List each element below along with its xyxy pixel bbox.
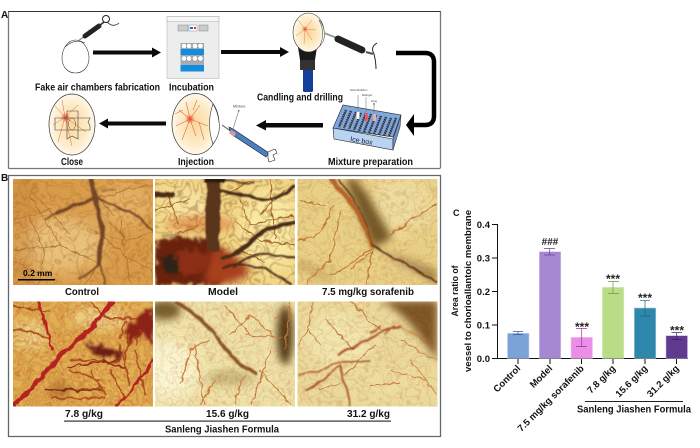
panel: C bar chart [450,208,691,434]
x axis labels: 7.8 g/kg [585,363,618,396]
photo: 15.6 g/kg [142,300,295,406]
bar: model [539,237,561,358]
label: fake air chambers fabrication: Fake air chambers fabrication [35,82,160,94]
scale bar: 0.2 mm [23,268,53,278]
photo: model [155,179,300,285]
bar: control [508,332,529,358]
label: mixture preparation: Mixture preparation [328,156,413,168]
bar: 7.8 g/kg [602,272,624,358]
panel C label: C [453,208,460,218]
x axis labels: Model [528,363,555,391]
photo: control [13,179,155,285]
label: candling and drilling: Candling and drilling [257,92,343,104]
arrow: incubation to candling [221,47,289,57]
y axis title: Area ratio of [450,265,461,316]
bar: 7.5 mg/kg sorafenib [571,320,592,358]
y axis title [450,210,474,372]
label: control: Control [65,286,99,298]
photo: 7.5 mg/kg sorafenib [297,177,438,285]
label: model: Model [208,286,238,298]
panel B label: B [1,173,8,184]
x axis labels: Control [491,363,523,395]
panel A label: A [1,10,8,21]
photo: 31.2 g/kg [298,301,438,406]
y axis and ticks: 0.0 [477,354,490,365]
bracket line: chart formula groups [585,401,683,402]
icon: injection egg and syringe [172,94,277,162]
y axis and ticks: 0.4 [477,220,491,231]
bar: 7.5 mg/kg sorafenib: *** [575,320,589,334]
x axis labels: 31.2 g/kg [645,363,682,400]
y axis and ticks: 0.3 [477,254,490,264]
icon: ice box with tubes [333,88,401,150]
arrow: injection to close [99,118,166,128]
label: 15.6 g/kg: 15.6 g/kg [206,408,249,420]
x axis labels: 15.6 g/kg [614,363,650,400]
icon: ice box with tubes: Ice box [350,136,374,147]
icon: candling lamp, egg and drill [293,13,377,92]
x axis labels [491,363,682,434]
label: close: Close [61,156,83,168]
label: 7.8 g/kg: 7.8 g/kg [65,408,103,420]
bar: 15.6 g/kg: *** [638,291,652,305]
icon: ice box with tubes: HGG-RGDfcn [350,88,368,92]
icon: incubator [167,16,219,78]
label: incubation: Incubation [169,82,214,94]
photo: 7.8 g/kg [12,301,153,406]
arrow: mixture to injection [256,120,323,130]
x axis labels: 7.5 mg/kg sorafenib [516,363,587,434]
bar: 31.2 g/kg [666,324,688,358]
arrow: curved candling to mixture [396,53,434,136]
icon: closed egg with tape [49,94,95,155]
panel: A workflow [1,10,441,168]
y axis and ticks: 0.1 [477,320,491,332]
bar: 15.6 g/kg [634,291,656,358]
icon: ice box with tubes: Matrigel [362,93,372,97]
icon: ice box with tubes: Drug [371,99,378,103]
bracket line: formula groups [64,420,391,422]
panel A frame [8,12,441,168]
icon: egg with fake air chamber tool [62,16,119,73]
bar: model: ### [542,237,559,248]
bar: 7.8 g/kg: *** [606,272,620,286]
bar: 31.2 g/kg: *** [670,324,684,338]
y axis and ticks [477,220,688,365]
label: Sanleng Jiashen Formula: Sanleng Jiashen Formula [165,424,279,436]
panel B frame [8,176,440,436]
y axis and ticks: 0.2 [477,287,490,298]
y axis title: vessel to chorioallantoic membrane [463,210,474,372]
label: 7.5 mg/kg sorafenib: 7.5 mg/kg sorafenib [322,286,414,298]
label: injection: Injection [178,156,214,168]
arrow: fabrication to incubation [93,48,161,58]
label: 31.2 g/kg: 31.2 g/kg [347,408,390,420]
scale bar [18,268,55,280]
icon: injection egg and syringe: Mixture [233,104,245,108]
panel: B CAM photographs [1,173,440,436]
